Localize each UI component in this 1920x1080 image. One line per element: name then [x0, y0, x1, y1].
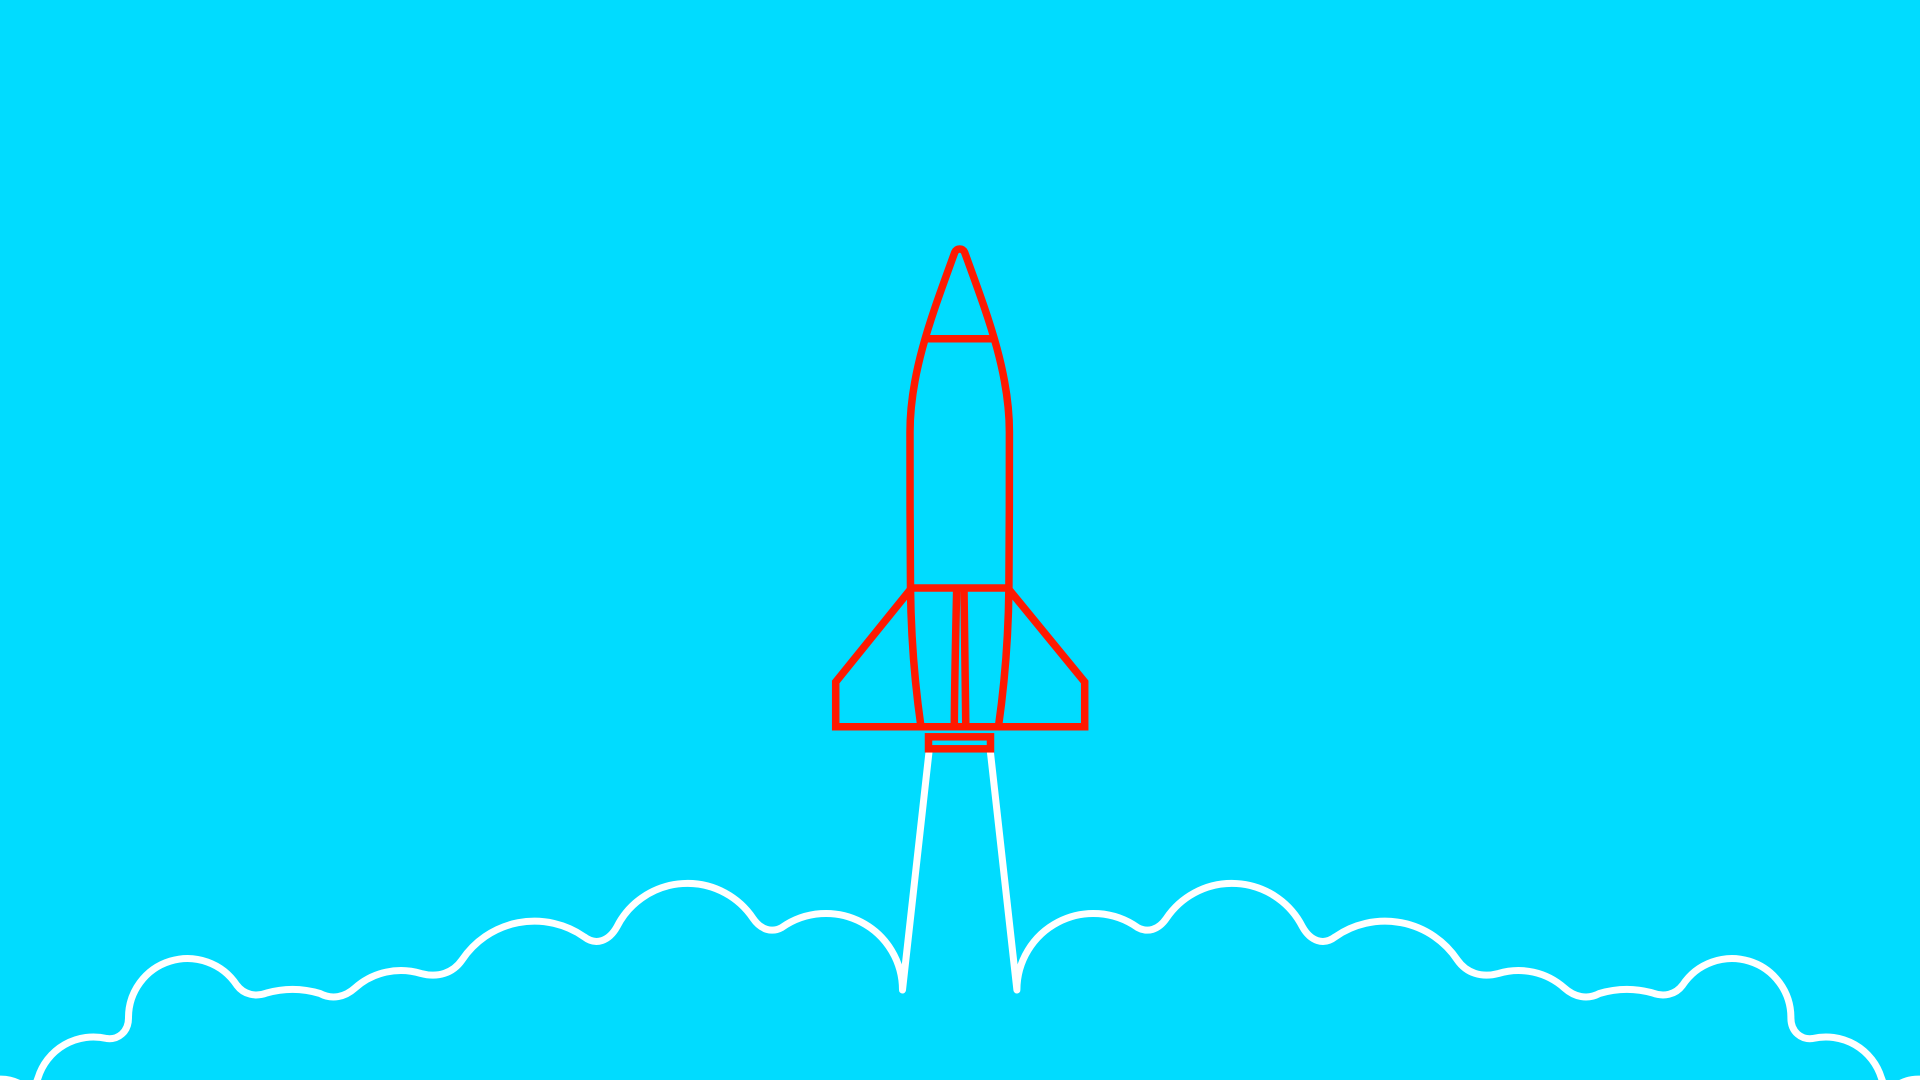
fins [836, 590, 1085, 727]
right smoke cloud and flame [990, 752, 1884, 1080]
right corner smoke puff [1897, 1079, 1920, 1080]
exhaust and smoke clouds [0, 752, 1920, 1080]
center right line [964, 588, 966, 727]
rocket body outline [910, 249, 1009, 727]
left corner smoke puff [0, 1079, 22, 1080]
left smoke cloud and flame [35, 752, 929, 1080]
nose cone band [924, 335, 995, 342]
rocket [836, 249, 1085, 749]
nozzle [928, 737, 990, 749]
body seam [910, 584, 1009, 592]
center left line [954, 588, 957, 727]
